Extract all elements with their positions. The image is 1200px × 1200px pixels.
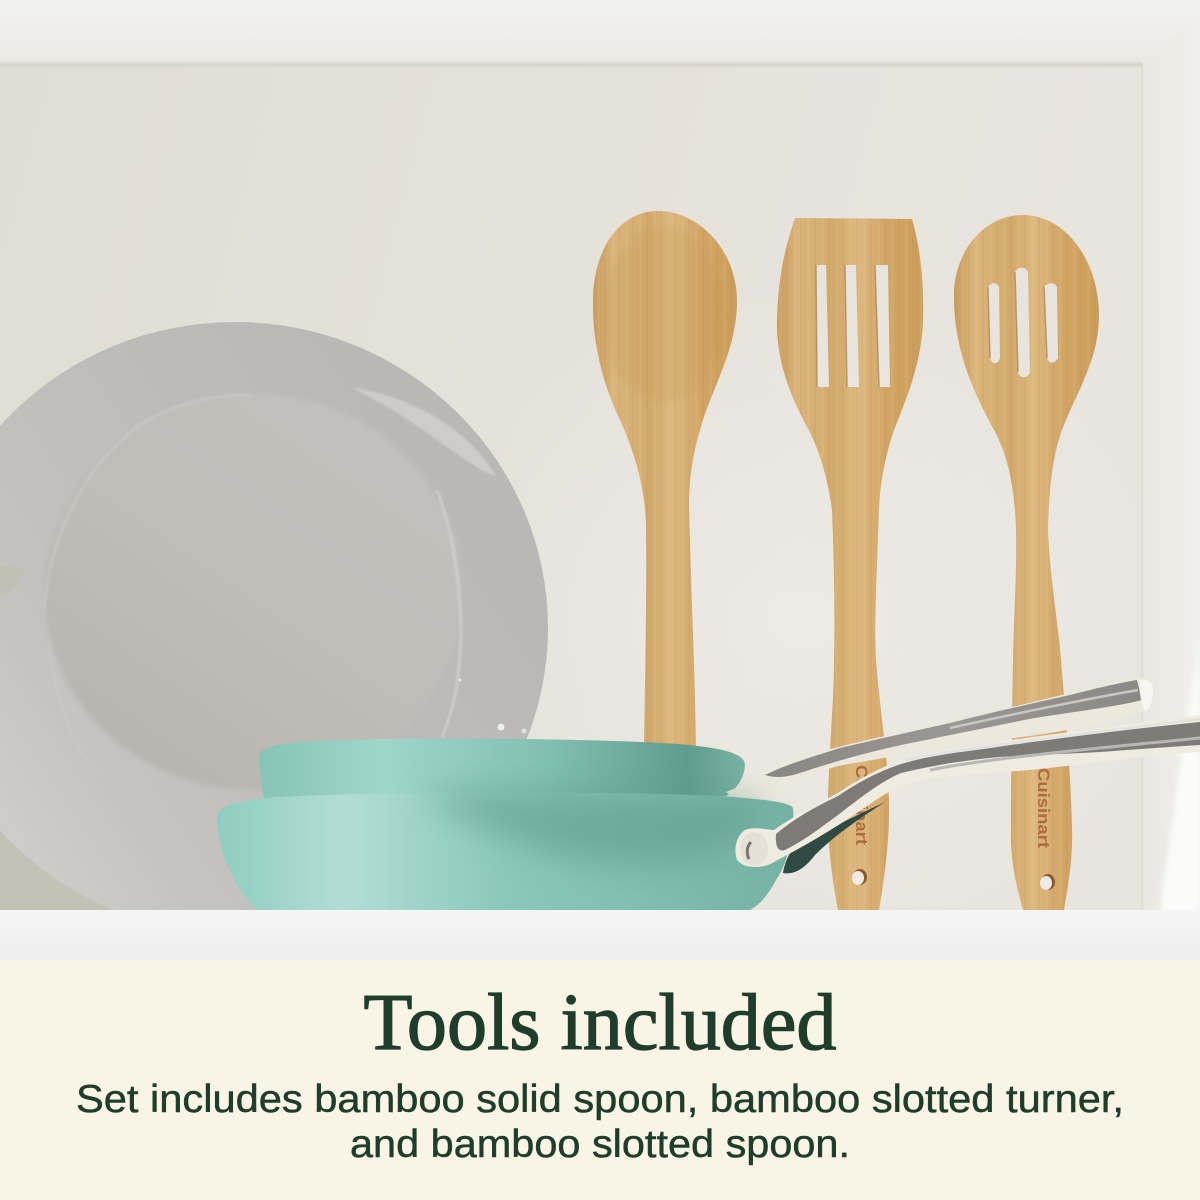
shelf front edge	[0, 910, 1200, 960]
bamboo slotted spoon	[954, 215, 1099, 910]
shelf right side wall	[1141, 10, 1200, 912]
dark handle bracket	[783, 802, 885, 873]
upper steel handle	[726, 678, 1154, 798]
rivet loop	[740, 832, 768, 866]
small teal pan	[259, 739, 745, 800]
solid bamboo spoon	[593, 211, 737, 750]
shelf back wall	[0, 62, 1180, 960]
photo: kitchen shelf scene	[0, 0, 1200, 960]
hanging hole: turner	[852, 869, 867, 885]
shelf top ledge	[0, 0, 1200, 67]
large gray plate	[0, 322, 548, 934]
lower steel handle	[735, 715, 1200, 867]
engraved logo: turner: Cuisinart	[852, 765, 871, 845]
heading: Tools included	[364, 979, 836, 1067]
silver knob	[0, 565, 24, 596]
bamboo slotted turner	[777, 218, 923, 910]
body line one: Set includes bamboo solid spoon, bamboo slotted turner,	[76, 1078, 1124, 1121]
body line two: and bamboo slotted spoon.	[350, 1123, 850, 1166]
body text	[76, 1078, 1124, 1166]
large teal pan	[217, 792, 793, 911]
hanging hole: slotted spoon	[1040, 874, 1055, 890]
plate inner well	[44, 394, 462, 790]
lower plate	[0, 800, 135, 912]
engraved logo: slotted spoon: Cuisinart	[1034, 768, 1053, 848]
caption panel	[0, 960, 1200, 1200]
